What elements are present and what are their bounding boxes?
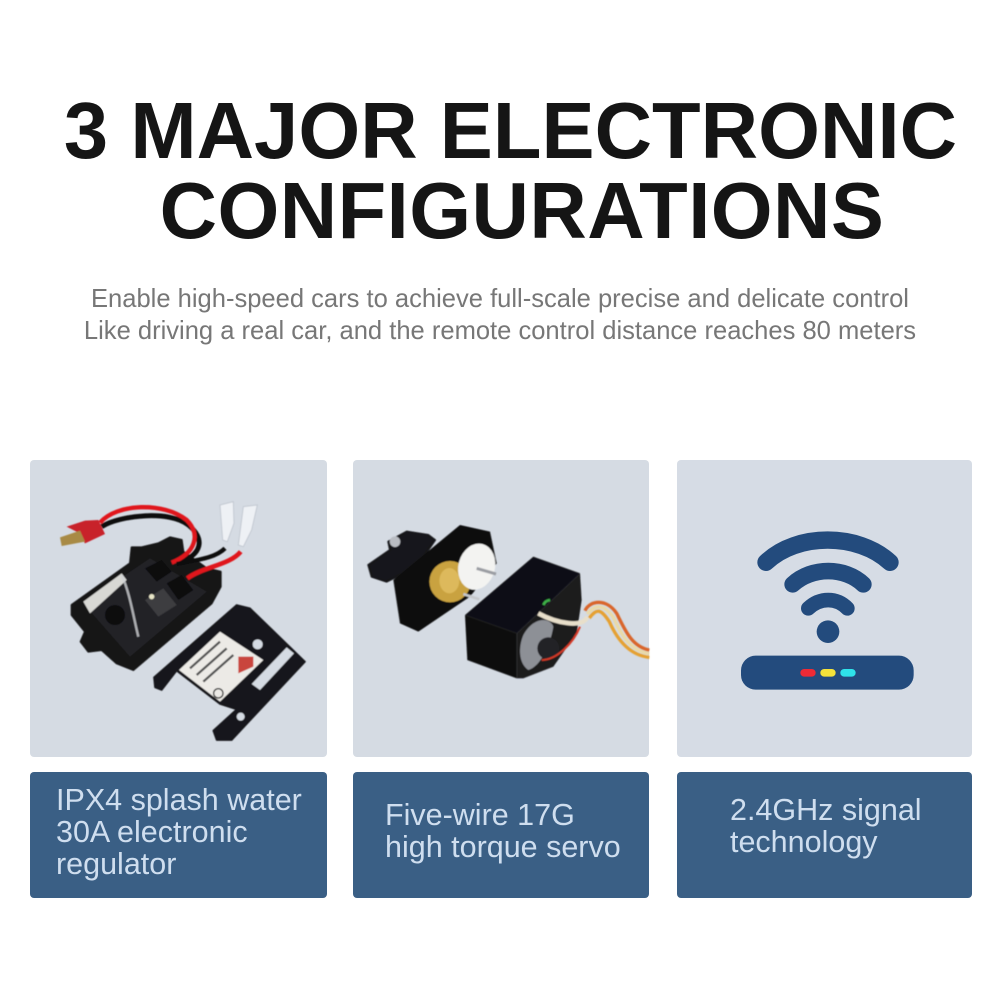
caption: regulator: regulator [56, 847, 176, 881]
subtitle: Like driving a real car, and the remote control distance reaches 80 meters [84, 317, 916, 345]
subtitle [84, 285, 916, 345]
panel: electronic regulator image [30, 460, 327, 757]
caption: servo: high torque servo [385, 830, 621, 864]
caption: servo: Five-wire 17G [385, 798, 575, 832]
caption: signal: 2.4GHz signal [730, 793, 922, 827]
caption: regulator: 30A electronic [56, 815, 248, 849]
panel: wifi image [677, 460, 972, 757]
icon: servo gearbox [368, 525, 649, 678]
subtitle: Enable high-speed cars to achieve full-scale precise and delicate control [91, 285, 909, 313]
icon: wifi router [741, 540, 914, 690]
title: 3 MAJOR ELECTRONIC [64, 86, 957, 175]
caption: regulator: IPX4 splash water [56, 783, 302, 817]
icon: electronic regulator board [60, 502, 305, 740]
caption: signal [677, 772, 972, 898]
title: CONFIGURATIONS [160, 166, 884, 255]
caption: servo [353, 772, 649, 898]
title [64, 86, 957, 255]
caption: regulator [30, 772, 327, 898]
panel: servo image [353, 460, 649, 757]
caption: signal: technology [730, 825, 878, 859]
